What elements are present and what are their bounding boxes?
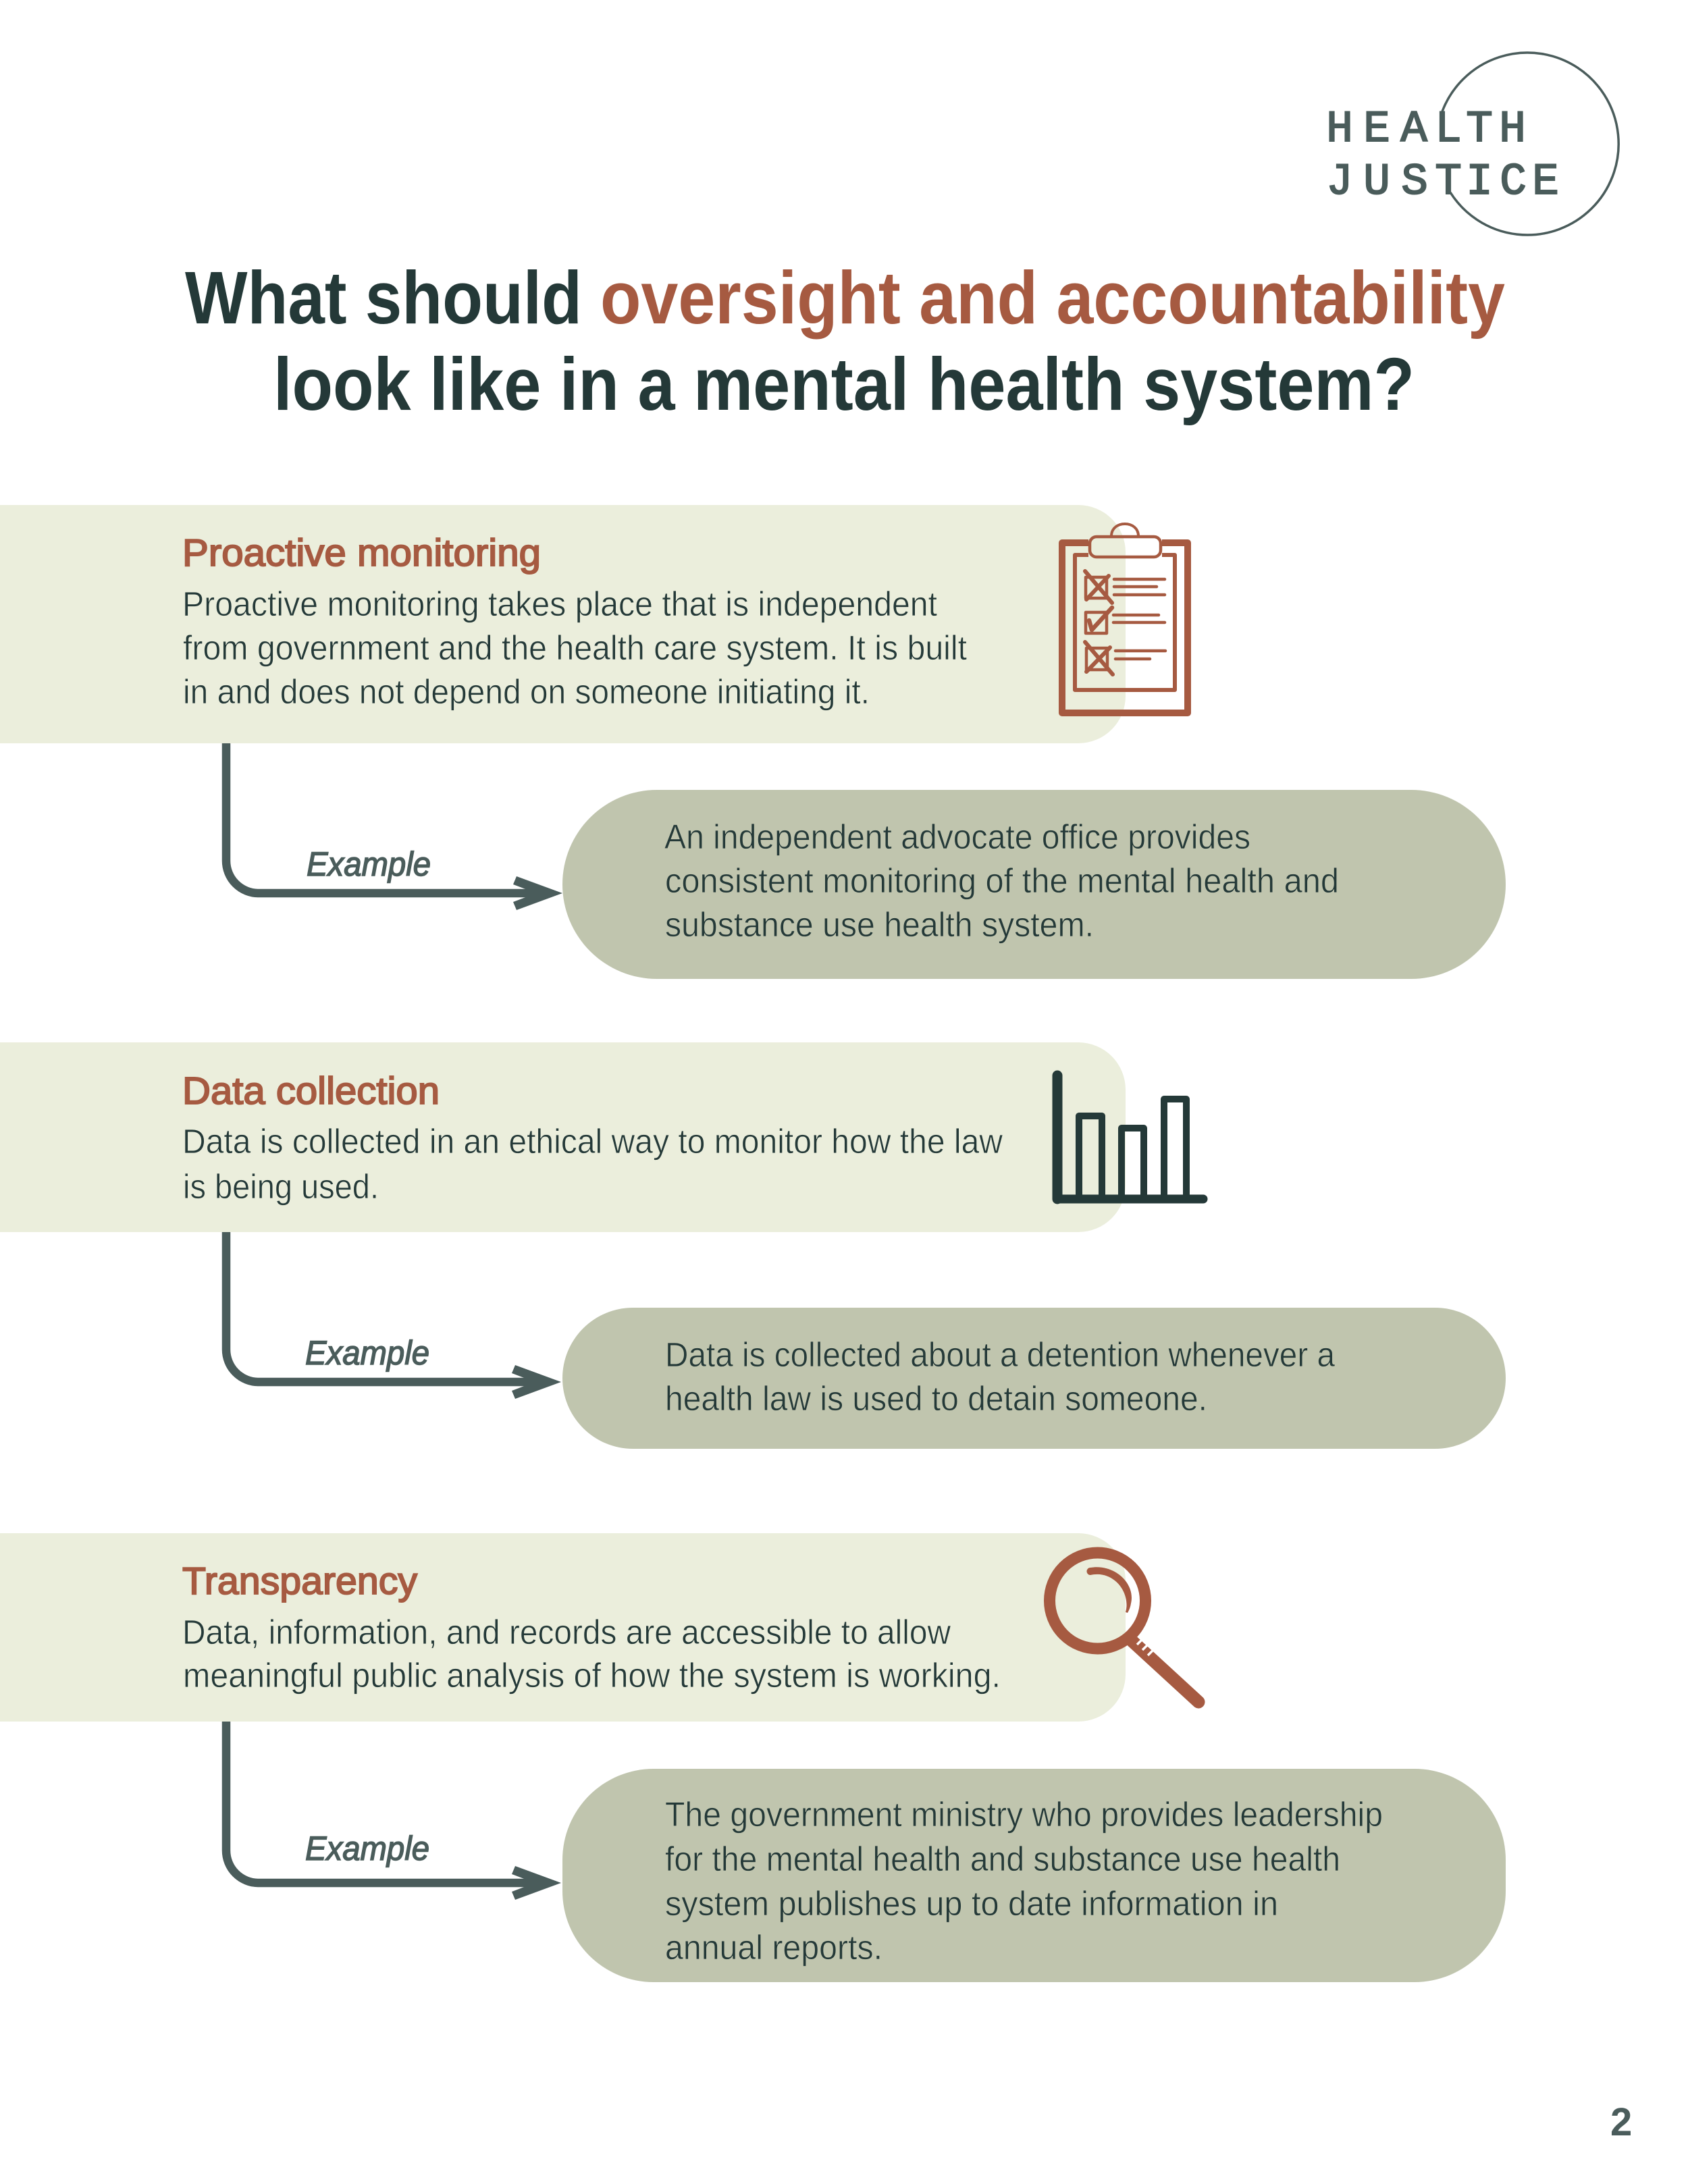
text block: proactive monitoring description: [182, 585, 967, 711]
pill: example 3: [562, 1769, 1506, 1982]
section: data collection: [0, 1042, 1506, 1449]
arrow: to example 3: [226, 1722, 561, 1900]
heading: proactive monitoring: Proactive monitoring: [182, 531, 541, 575]
text block: proactive monitoring description: in and does not depend on someone initiating it.: [183, 672, 870, 711]
text block: transparency description: [182, 1613, 1001, 1695]
text block: example 1: An independent advocate office provides: [664, 818, 1250, 856]
icon: bar chart: [1057, 1075, 1203, 1199]
text block: example 2: health law is used to detain someone.: [665, 1379, 1207, 1418]
label: example 1: Example: [307, 845, 431, 883]
panel: transparency: [0, 1533, 1126, 1722]
heading: data collection: Data collection: [182, 1069, 440, 1113]
text block: proactive monitoring description: Proactive monitoring takes place that is independent: [182, 585, 937, 623]
text block: data collection description: Data is collected in an ethical way to monitor how the law: [182, 1122, 1003, 1161]
text block: example 3: annual reports.: [665, 1928, 882, 1967]
panel: data collection: [0, 1042, 1126, 1232]
icon: magnifying glass: [1049, 1553, 1198, 1702]
pill: example 1: [562, 790, 1506, 979]
text block: transparency description: meaningful public analysis of how the system is working.: [183, 1656, 1001, 1695]
page number: 2: [1610, 2100, 1632, 2144]
section: proactive monitoring: [0, 505, 1506, 979]
text block: data collection description: is being used.: [183, 1167, 379, 1206]
text block: example 3: [665, 1795, 1383, 1967]
pill: example 2: [562, 1308, 1506, 1449]
text block: example 1: [664, 818, 1339, 944]
text block: example 1: consistent monitoring of the mental health and: [665, 861, 1339, 900]
text block: data collection description: [182, 1122, 1003, 1206]
panel: proactive monitoring: [0, 505, 1126, 743]
title: [185, 257, 1505, 426]
logo wordmark line 2: JUSTICE: [1326, 157, 1559, 207]
logo wordmark line 1: HEALTH: [1326, 104, 1526, 155]
text block: example 1: substance use health system.: [665, 905, 1094, 944]
title: look like in a mental health system?: [273, 343, 1415, 426]
text block: example 2: [665, 1335, 1336, 1418]
label: example 2: Example: [305, 1334, 429, 1372]
text block: example 2: Data is collected about a detention whenever a: [665, 1335, 1336, 1374]
section: transparency: [0, 1533, 1506, 1982]
text block: proactive monitoring description: from government and the health care system. It is built: [183, 629, 967, 667]
logo: Health Justice: [1326, 53, 1618, 235]
title: oversight and accountability: [600, 257, 1505, 340]
text block: example 3: system publishes up to date information in: [665, 1884, 1278, 1923]
arrow: to example 2: [226, 1232, 561, 1399]
text block: example 3: The government ministry who provides leadership: [665, 1795, 1383, 1834]
logo circle: [1442, 53, 1618, 235]
title: What should: [185, 257, 582, 340]
text block: example 3: for the mental health and substance use health: [665, 1840, 1340, 1878]
text block: transparency description: Data, information, and records are accessible to allow: [182, 1613, 951, 1651]
label: example 3: Example: [305, 1830, 429, 1867]
heading: transparency: Transparency: [182, 1560, 417, 1603]
arrow: to example 1: [226, 743, 562, 910]
icon: clipboard checklist: [1062, 524, 1188, 713]
